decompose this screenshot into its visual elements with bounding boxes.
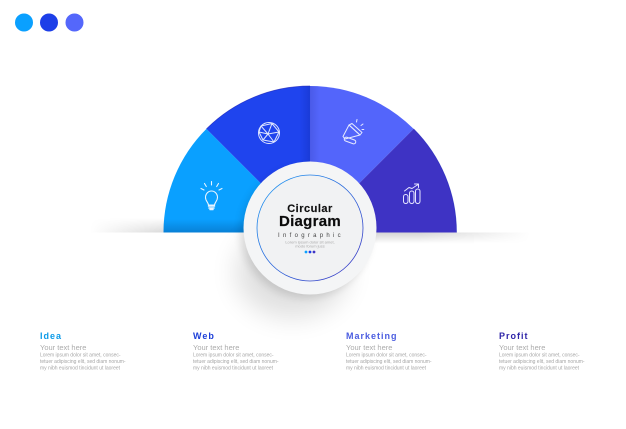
segment: idea	[164, 129, 310, 232]
text block: profit: Lorem ipsum dolor sit amet, consec-	[499, 352, 580, 358]
text block: web: Web	[193, 331, 215, 341]
text block: marketing: Your text here	[346, 343, 392, 352]
text block: idea: my nibh euismod tincidunt ut laoreet	[40, 366, 121, 372]
text block: web: my nibh euismod tincidunt ut laoreet	[193, 366, 274, 372]
segment: marketing	[310, 86, 414, 232]
center hub: modo forum juss	[295, 244, 325, 248]
hub dots	[305, 251, 315, 253]
semicircle chart	[164, 86, 456, 232]
text block: web: Lorem ipsum dolor sit amet, consec-	[193, 352, 274, 358]
center hub	[244, 162, 376, 294]
segment: profit	[310, 129, 456, 232]
hub shadow	[236, 166, 372, 318]
text block: profit	[499, 331, 585, 372]
icon: megaphone	[343, 120, 364, 144]
text block: web	[193, 331, 279, 372]
text block: profit: Your text here	[499, 343, 545, 352]
text block: profit: tetuer adipiscing elit, sed diam nonum-	[499, 359, 585, 365]
segment: web	[206, 86, 310, 232]
inner ring	[257, 175, 363, 281]
icon: growth bars	[404, 184, 420, 204]
text block: idea	[40, 331, 126, 372]
center hub: Infographic	[278, 233, 344, 239]
hub caption: Lorem ipsum dolor sit amet,	[285, 240, 335, 244]
text block: web: Your text here	[193, 343, 239, 352]
icon: globe network	[258, 122, 280, 144]
hub title: Circular	[287, 203, 333, 215]
text block: profit: Profit	[499, 331, 528, 341]
center hub: Diagram	[279, 213, 341, 230]
icon: light bulb	[201, 182, 222, 210]
text block: marketing: Lorem ipsum dolor sit amet, consec-	[346, 352, 427, 358]
base shadows	[107, 222, 508, 242]
text block: profit: my nibh euismod tincidunt ut laoreet	[499, 366, 580, 372]
text block: marketing: tetuer adipiscing elit, sed diam nonum-	[346, 359, 432, 365]
text block: marketing: Marketing	[346, 331, 398, 341]
text block: marketing: my nibh euismod tincidunt ut laoreet	[346, 366, 427, 372]
text block: idea: Your text here	[40, 343, 86, 352]
text block: idea: tetuer adipiscing elit, sed diam nonum-	[40, 359, 126, 365]
text block: idea: Idea	[40, 331, 62, 341]
legend dots	[15, 14, 84, 32]
text block: marketing	[346, 331, 432, 372]
text block: idea: Lorem ipsum dolor sit amet, consec-	[40, 352, 121, 358]
text block: web: tetuer adipiscing elit, sed diam nonum-	[193, 359, 279, 365]
